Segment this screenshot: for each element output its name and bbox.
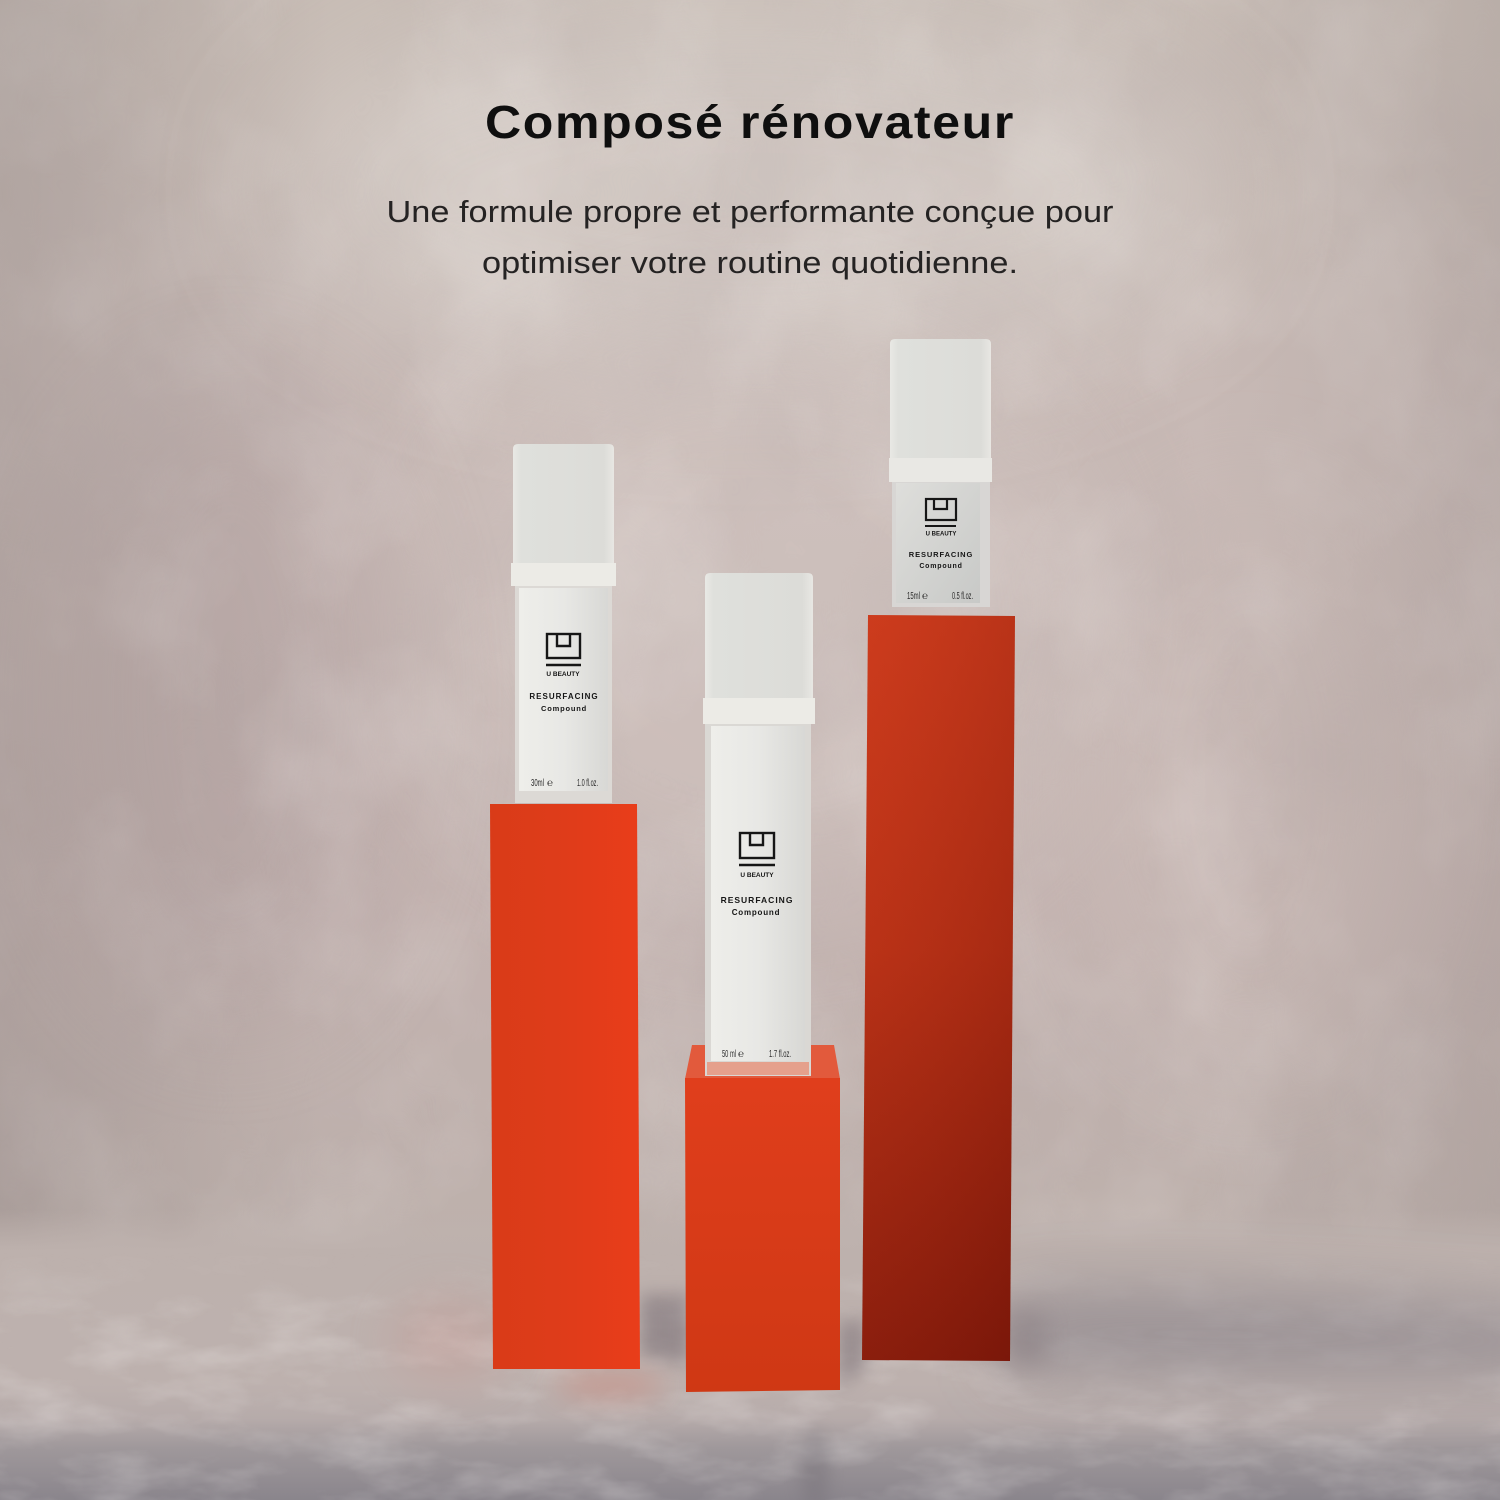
- logo: [739, 833, 775, 865]
- volume text: ℮: [738, 1049, 744, 1060]
- product text: Compound: [541, 704, 587, 713]
- left bottle 30 ml: [511, 444, 616, 803]
- volume text: 50 ml: [722, 1049, 736, 1060]
- center bottle 50 ml: [703, 573, 815, 1076]
- product text: [721, 872, 793, 917]
- title: Composé rénovateur: [485, 96, 1015, 148]
- product text: RESURFACING: [721, 895, 793, 905]
- subtitle text block: optimiser votre routine quotidienne.: [482, 245, 1018, 280]
- volume text: [907, 591, 973, 602]
- product text: U BEAUTY: [546, 671, 580, 678]
- block shadows on floor: [640, 1295, 1045, 1388]
- clear base: [515, 586, 612, 803]
- clear base: [705, 724, 811, 1076]
- product text: RESURFACING: [529, 692, 599, 701]
- right red pedestal: [862, 615, 1015, 1361]
- collar: [703, 698, 815, 724]
- backdrop: floor surface: [0, 1210, 1500, 1500]
- subtitle text block: [386, 194, 1114, 280]
- label panel: [896, 483, 980, 603]
- volume text: ℮: [547, 778, 553, 789]
- volume text: 1.7 fl.oz.: [769, 1049, 791, 1060]
- right bottle 15 ml: [889, 339, 992, 607]
- product text: RESURFACING: [909, 550, 973, 559]
- center red pedestal: [685, 1045, 840, 1392]
- cap: [513, 444, 614, 563]
- volume text: ℮: [922, 591, 928, 602]
- label panel: [519, 588, 608, 791]
- product text: Compound: [919, 563, 963, 570]
- subtitle text block: Une formule propre et performante conçue pour: [386, 194, 1114, 229]
- product text: [909, 532, 973, 570]
- label panel: [711, 726, 805, 1061]
- collar: [889, 458, 992, 482]
- clear base: [892, 482, 990, 607]
- product text: U BEAUTY: [926, 532, 956, 538]
- collar: [511, 563, 616, 586]
- volume text: 0.5 fl.oz.: [952, 591, 973, 602]
- cap: [890, 339, 991, 458]
- volume text: 1.0 fl.oz.: [577, 778, 598, 789]
- left red pedestal: [490, 804, 640, 1369]
- right floor shadow: [1000, 1290, 1500, 1379]
- cap: [705, 573, 813, 698]
- volume text: [722, 1049, 791, 1060]
- logo: [925, 499, 956, 526]
- volume text: 15ml: [907, 591, 920, 602]
- dark fold at front: [801, 1430, 829, 1500]
- product text: Compound: [732, 908, 780, 917]
- volume text: [531, 778, 598, 789]
- product text: [529, 671, 599, 713]
- volume text: 30ml: [531, 778, 544, 789]
- logo: [546, 634, 581, 665]
- reflected red glow: [390, 1295, 510, 1385]
- product text: U BEAUTY: [740, 872, 774, 879]
